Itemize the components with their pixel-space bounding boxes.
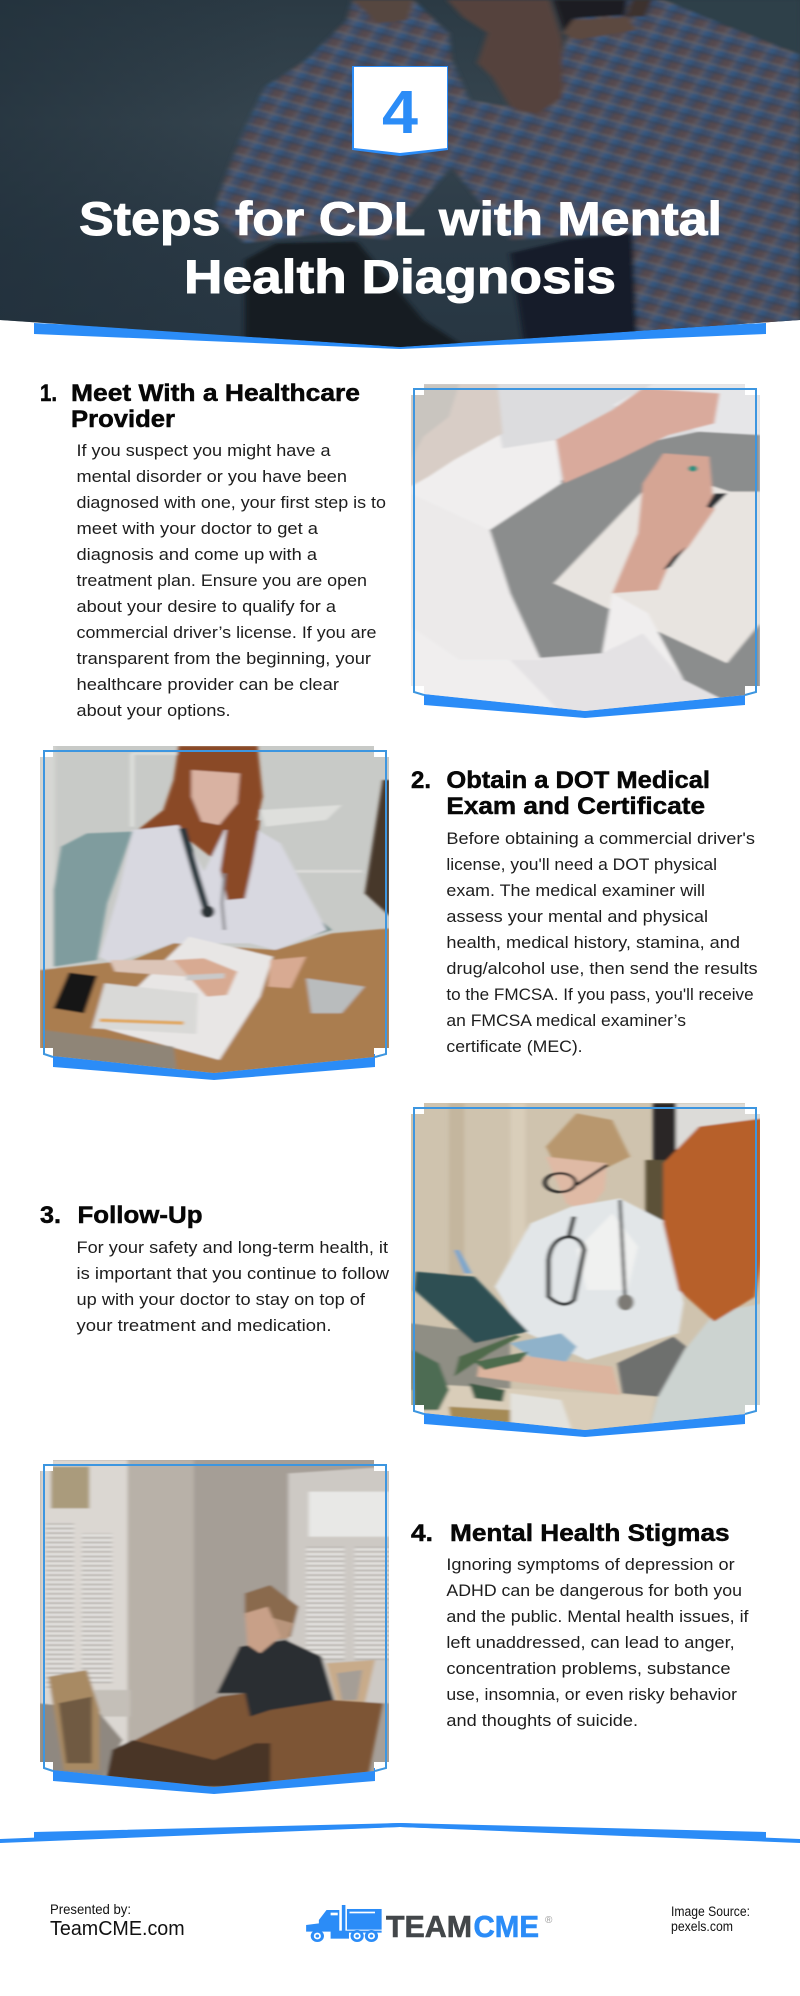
step 1 body text: commercial driver’s license. If you are <box>76 623 376 642</box>
step 1 heading: 1. <box>40 380 57 407</box>
step 4 body text: and the public. Mental health issues, if <box>446 1607 749 1626</box>
step 2 heading: Obtain a DOT Medical <box>446 767 710 794</box>
step 2 body text <box>446 829 758 1056</box>
step 4 body text: and thoughts of suicide. <box>446 1711 638 1730</box>
step 4 body text: ADHD can be dangerous for both you <box>446 1581 742 1600</box>
blue frame 3 <box>414 1108 756 1414</box>
step 1 heading: Provider <box>71 406 175 433</box>
step 1 body text: transparent from the beginning, your <box>76 649 371 668</box>
photo 3 <box>411 1103 763 1443</box>
logo: TeamCME truck and wordmark: CME <box>474 1909 539 1944</box>
photo 1 <box>411 384 760 713</box>
presented by: TeamCME.com <box>50 1918 185 1940</box>
step 1 body text: treatment plan. Ensure you are open <box>76 571 367 590</box>
step 3 body text: your treatment and medication. <box>76 1316 332 1335</box>
step 2 body text: certificate (MEC). <box>446 1037 583 1056</box>
presented by <box>50 1901 185 1940</box>
step 3 body text: For your safety and long-term health, it <box>76 1238 388 1257</box>
presented by: Presented by: <box>50 1901 131 1917</box>
step 4 heading: Mental Health Stigmas <box>450 1520 730 1547</box>
step 3 heading: Follow-Up <box>78 1202 202 1229</box>
hero photo: man holding his head <box>0 0 800 353</box>
step 2 body text: license, you'll need a DOT physical <box>446 855 717 874</box>
step 1 heading: Meet With a Healthcare <box>71 380 360 407</box>
photo panel 1: doctor writing in notebook <box>411 384 760 718</box>
step 2 body text: assess your mental and physical <box>446 907 708 926</box>
step 1 heading <box>40 380 360 433</box>
footer divider chevron <box>0 1823 800 1843</box>
blue chevron 4 <box>53 1768 375 1794</box>
photo panel 2: doctor at desk <box>40 746 390 1083</box>
step 4 heading: 4. <box>411 1520 433 1547</box>
logo: TeamCME truck and wordmark <box>306 1905 553 1944</box>
image source <box>671 1904 750 1934</box>
step 4 body text: left unaddressed, can lead to anger, <box>446 1633 735 1652</box>
step 2 heading: Exam and Certificate <box>446 793 705 820</box>
blue frame 4 <box>44 1465 386 1771</box>
step 3 heading: 3. <box>40 1202 61 1229</box>
step 2 body text: an FMCSA medical examiner’s <box>446 1011 686 1030</box>
image source: pexels.com <box>671 1919 733 1934</box>
step 4 body text: concentration problems, substance <box>446 1659 731 1678</box>
header band: blue chevron under hero <box>34 323 766 349</box>
photo panel 3: doctor measuring blood pressure <box>411 1103 763 1443</box>
step 3 body text: up with your doctor to stay on top of <box>76 1290 365 1309</box>
step 1 body text: diagnosis and come up with a <box>76 545 318 564</box>
photo panel 4: man at table <box>40 1460 390 1794</box>
blue chevron 2 <box>53 1054 375 1080</box>
step 1 body text: about your options. <box>76 701 230 720</box>
step 4 body text <box>446 1555 749 1730</box>
step 2 body text: drug/alcohol use, then send the results <box>446 959 758 978</box>
image source: Image Source: <box>671 1904 750 1919</box>
logo: TeamCME truck and wordmark: ® <box>545 1915 553 1926</box>
wordmark: TEAM <box>386 1909 472 1944</box>
photo 4 <box>40 1460 390 1787</box>
badge with number 4 <box>352 66 448 156</box>
step 2 heading: 2. <box>411 767 431 794</box>
step 4 body text: use, insomnia, or even risky behavior <box>446 1685 737 1704</box>
title <box>79 192 722 303</box>
step 2 heading <box>411 767 710 820</box>
step 2 body text: health, medical history, stamina, and <box>446 933 740 952</box>
step 1 body text <box>76 441 386 720</box>
badge with number 4: 4 <box>382 78 418 146</box>
step 1 body text: diagnosed with one, your first step is to <box>76 493 386 512</box>
step 3 body text: is important that you continue to follow <box>76 1264 390 1283</box>
step 2 body text: to the FMCSA. If you pass, you'll receive <box>446 985 754 1004</box>
step 2 body text: exam. The medical examiner will <box>446 881 705 900</box>
photo 2 <box>40 746 390 1083</box>
step 1 body text: healthcare provider can be clear <box>76 675 339 694</box>
blue frame 2 <box>44 751 386 1057</box>
step 1 body text: If you suspect you might have a <box>76 441 331 460</box>
blue chevron 3 <box>424 1411 745 1437</box>
step 1 body text: about your desire to qualify for a <box>76 597 337 616</box>
blue frame 1 <box>414 389 756 695</box>
icon: truck <box>306 1905 382 1942</box>
step 2 body text: Before obtaining a commercial driver's <box>446 829 755 848</box>
title: Health Diagnosis <box>184 250 616 303</box>
title: Steps for CDL with Mental <box>79 192 722 245</box>
step 1 body text: meet with your doctor to get a <box>76 519 319 538</box>
step 4 body text: Ignoring symptoms of depression or <box>446 1555 735 1574</box>
blue chevron 1 <box>424 692 745 718</box>
step 1 body text: mental disorder or you have been <box>76 467 347 486</box>
step 3 body text <box>76 1238 390 1335</box>
